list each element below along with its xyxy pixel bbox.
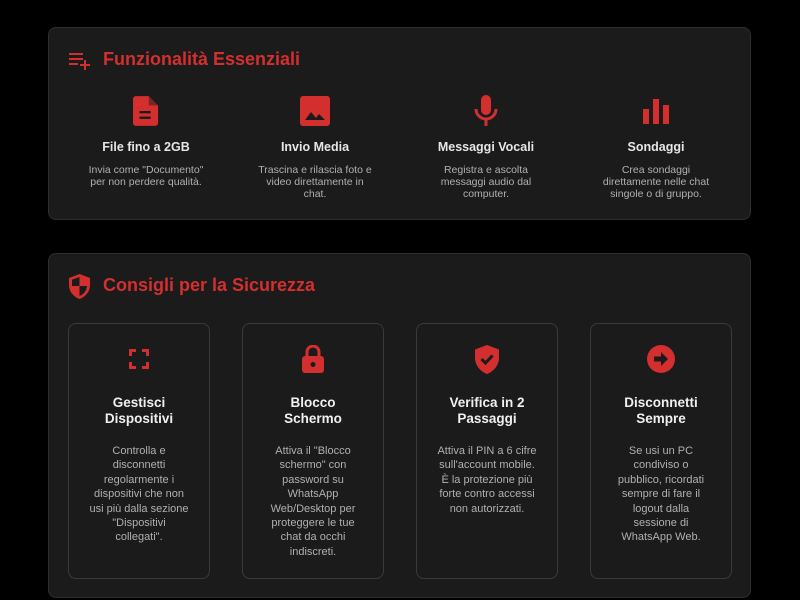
- card: Gestisci Dispositivi: collegati".: [115, 531, 163, 543]
- card: Gestisci Dispositivi: dispositivi che non: [94, 488, 184, 500]
- card: Blocco Schermo: Web/Desktop per: [271, 503, 355, 515]
- card: Gestisci Dispositivi: regolarmente i: [104, 474, 174, 486]
- feature: vocali: [438, 95, 534, 200]
- panel: Consigli per la Sicurezza: [48, 253, 751, 598]
- card: Disconnetti Sempre: [590, 323, 732, 579]
- feature: media: chat.: [304, 188, 326, 200]
- card: Verifica in 2 Passaggi: Attiva il PIN a 6 cifre: [437, 445, 537, 457]
- card: Verifica in 2 Passaggi: non autorizzati.: [450, 503, 524, 515]
- card: Disconnetti Sempre: Sempre: [636, 411, 686, 426]
- card: Blocco Schermo: Schermo: [284, 411, 342, 426]
- feature: vocali: messaggi audio dal: [441, 176, 531, 188]
- heading: Consigli per la Sicurezza: Consigli per la Sicurezza: [103, 275, 315, 295]
- card: Verifica in 2 Passaggi: sull'account mobile.: [439, 459, 535, 471]
- feature: file: [89, 96, 203, 188]
- card: Disconnetti Sempre: Disconnetti: [624, 395, 698, 410]
- card: Disconnetti Sempre: WhatsApp Web.: [621, 531, 701, 543]
- heading: Funzionalità Essenziali: Funzionalità Essenziali: [103, 49, 300, 69]
- card: Disconnetti Sempre: pubblico, ricordati: [618, 474, 704, 486]
- feature: file: per non perdere qualità.: [90, 176, 202, 188]
- card: Blocco Schermo: Attiva il "Blocco: [275, 445, 351, 457]
- feature: sondaggi: [603, 99, 710, 200]
- feature: vocali: Registra e ascolta: [444, 164, 528, 176]
- card: Blocco Schermo: schermo" con: [280, 459, 346, 471]
- feature: sondaggi: singole o di gruppo.: [610, 188, 702, 200]
- card: Blocco Schermo: indiscreti.: [290, 546, 336, 558]
- feature: vocali: Messaggi Vocali: [438, 140, 534, 154]
- icon: shield: [69, 274, 90, 299]
- feature: sondaggi: direttamente nelle chat: [603, 176, 709, 188]
- card: Gestisci Dispositivi: Dispositivi: [105, 411, 173, 426]
- card: Verifica in 2 Passaggi: forte contro accessi: [439, 488, 535, 500]
- card: Blocco Schermo: WhatsApp: [288, 488, 338, 500]
- feature: sondaggi: Sondaggi: [628, 140, 684, 154]
- card: Disconnetti Sempre: sessione di: [633, 517, 689, 529]
- panel: Funzionalità Essenziali: [48, 27, 751, 220]
- card: Gestisci Dispositivi: Controlla e: [112, 445, 166, 457]
- card: Blocco Schermo: [242, 323, 384, 579]
- feature: media: video direttamente in: [266, 176, 364, 188]
- card: Verifica in 2 Passaggi: È la protezione più: [441, 474, 533, 486]
- feature: file: Invia come "Documento": [89, 164, 203, 176]
- card: Verifica in 2 Passaggi: [416, 323, 558, 579]
- card: Disconnetti Sempre: Se usi un PC: [629, 445, 693, 457]
- card: Gestisci Dispositivi: usi più dalla sezione: [89, 503, 189, 515]
- card: Disconnetti Sempre: logout dalla: [633, 503, 689, 515]
- card: Verifica in 2 Passaggi: Passaggi: [457, 411, 517, 426]
- card: Blocco Schermo: chat da occhi: [281, 531, 345, 543]
- card: Disconnetti Sempre: condiviso o: [633, 459, 689, 471]
- card: Gestisci Dispositivi: "Dispositivi: [112, 517, 166, 529]
- card: Gestisci Dispositivi: [68, 323, 210, 579]
- card: Blocco Schermo: password su: [282, 474, 344, 486]
- feature: media: Trascina e rilascia foto e: [258, 164, 372, 176]
- card: Gestisci Dispositivi: Gestisci: [113, 395, 165, 410]
- feature: media: [258, 96, 372, 200]
- feature: vocali: computer.: [463, 188, 509, 200]
- card: Verifica in 2 Passaggi: Verifica in 2: [449, 395, 525, 410]
- feature: sondaggi: Crea sondaggi: [622, 164, 690, 176]
- card: Blocco Schermo: Blocco: [290, 395, 336, 410]
- icon: playlist add: [69, 53, 90, 70]
- card: Blocco Schermo: proteggere le tue: [271, 517, 355, 529]
- feature: media: Invio Media: [281, 140, 349, 154]
- feature: file: File fino a 2GB: [102, 140, 190, 154]
- card: Gestisci Dispositivi: disconnetti: [113, 459, 165, 471]
- card: Disconnetti Sempre: sempre di fare il: [622, 488, 700, 500]
